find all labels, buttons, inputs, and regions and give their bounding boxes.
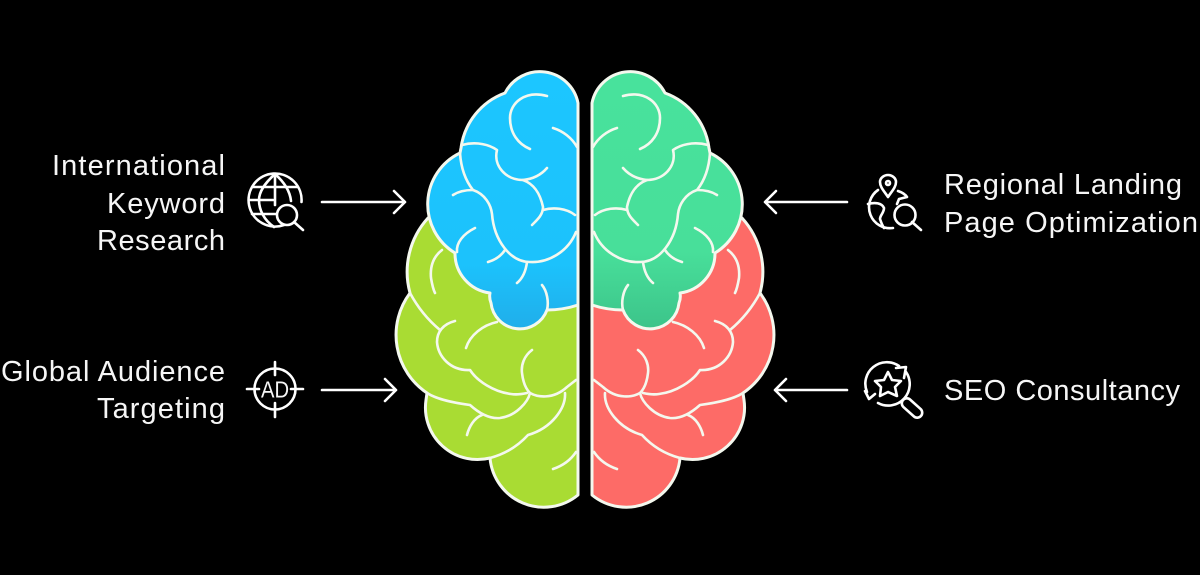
icon: star with magnifier [865,362,924,420]
label: Global Audience Targeting [1,356,225,425]
arrow: to coral lobe [775,379,847,401]
label: International Keyword Research: International [52,150,225,182]
arrow: to blue lobe [322,191,405,213]
brain folds: teal [593,95,717,310]
brain lobe: blue upper left [428,72,578,329]
label: Regional Landing Page Optimization: Page Optimization [944,207,1198,239]
brain lobe: lime lower left [396,218,578,507]
label: Regional Landing Page Optimization [944,169,1198,239]
label: Global Audience Targeting: Global Audience [1,356,225,388]
brain: left hemisphere [396,72,578,507]
brain lobe: coral lower right [592,218,774,507]
arrow: to teal lobe [765,191,847,213]
label: Global Audience Targeting: Targeting [97,393,225,425]
arrow: to lime lobe [322,379,396,401]
brain folds: lime [410,250,576,469]
brain folds: coral [594,250,760,469]
icon: AD target: AD [261,376,289,402]
label: International Keyword Research [52,150,225,257]
label: SEO Consultancy: SEO Consultancy [944,375,1180,407]
icon: AD target [247,362,303,417]
label: International Keyword Research: Research [97,225,225,257]
brain: right hemisphere [592,72,774,507]
icon: pin globe with magnifier [868,175,921,230]
brain folds: blue [453,95,577,310]
icon: globe with magnifier [249,174,303,230]
brain lobe: teal upper right [592,72,742,329]
label: Regional Landing Page Optimization: Regional Landing [944,169,1182,201]
label: International Keyword Research: Keyword [107,188,225,220]
